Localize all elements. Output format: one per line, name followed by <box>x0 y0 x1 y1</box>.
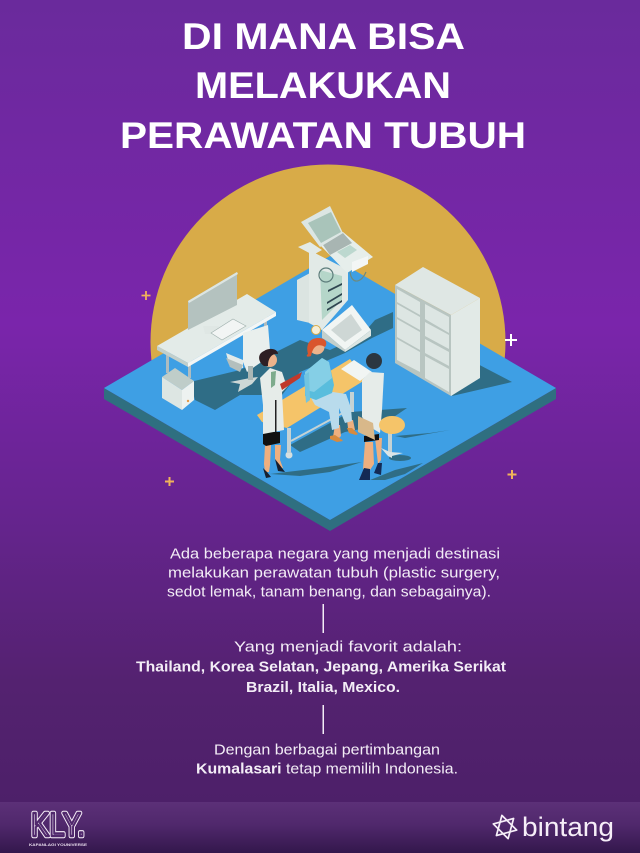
title: PERAWATAN TUBUH <box>120 115 526 156</box>
storage cabinet <box>395 267 480 396</box>
closing text: Dengan berbagai pertimbangan <box>214 742 440 758</box>
divider two <box>322 705 324 734</box>
isometric clinic floor <box>104 256 556 531</box>
office chair <box>226 325 270 392</box>
desk with monitor and keyboard <box>157 272 276 410</box>
title: DI MANA BISA <box>182 16 465 57</box>
intro text: Ada beberapa negara yang menjadi destinasi <box>170 546 500 562</box>
stool <box>379 416 405 458</box>
favourites text: Brazil, Italia, Mexico. <box>246 680 400 696</box>
intro text: melakukan perawatan tubuh (plastic surgery, <box>168 566 500 582</box>
logo: KLY: KAPANLAGI YOUNIVERSE <box>29 842 87 847</box>
doctor left <box>259 349 302 478</box>
floor shadows <box>190 312 512 480</box>
favourites text: Thailand, Korea Selatan, Jepang, Amerika Serikat <box>136 660 506 676</box>
footer band <box>0 802 640 853</box>
drawer unit <box>162 368 194 410</box>
divider one <box>322 604 324 633</box>
sparkles <box>142 291 517 486</box>
logo: KLY: KLY. <box>31 806 85 843</box>
logo: KLY: KLY. <box>31 806 85 843</box>
favourites text: Yang menjadi favorit adalah: <box>234 640 462 656</box>
keyboard <box>211 319 246 340</box>
doctor right <box>358 353 384 480</box>
logo: bintang: bintang <box>522 812 614 842</box>
closing text <box>196 742 458 778</box>
intro text: sedot lemak, tanam benang, dan sebagainya). <box>167 584 491 600</box>
closing text: Kumalasari tetap memilih Indonesia. <box>196 762 458 778</box>
monitor <box>188 272 238 334</box>
gold circle backdrop <box>150 164 506 360</box>
title: MELAKUKAN <box>195 65 451 106</box>
favourites text <box>136 640 506 696</box>
ultrasound machine <box>297 206 373 352</box>
patient <box>304 338 358 442</box>
examination bed <box>257 359 372 458</box>
title <box>120 16 526 156</box>
intro text <box>167 546 500 600</box>
